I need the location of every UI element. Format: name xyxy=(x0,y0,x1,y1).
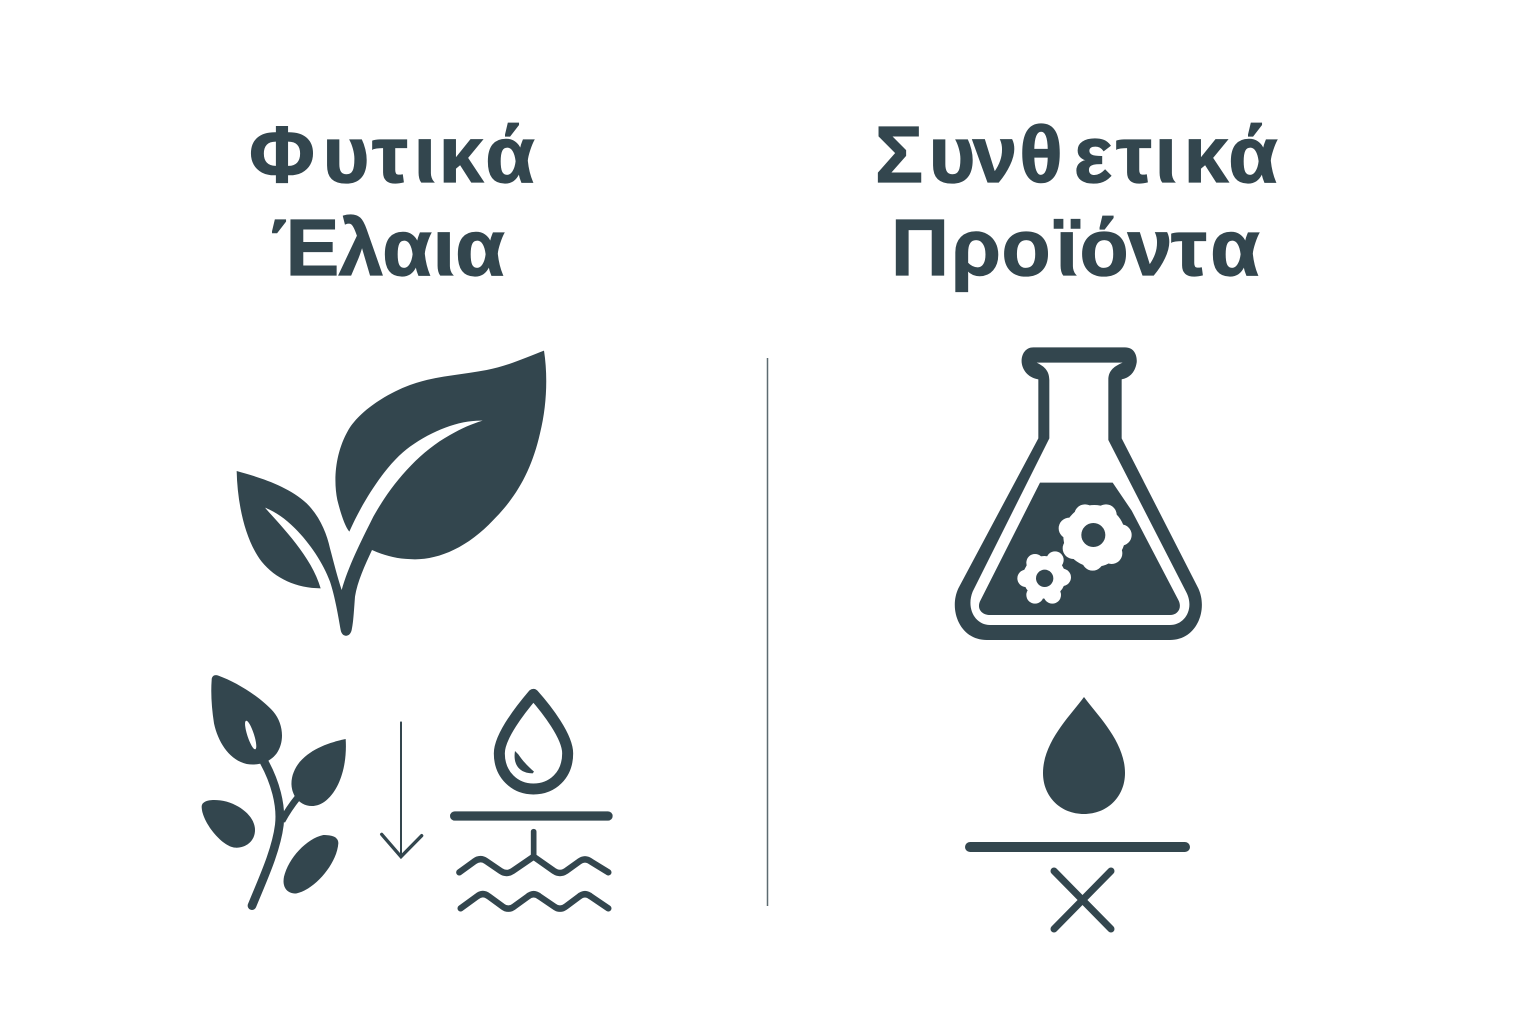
icon: oil drop absorbed into surface xyxy=(455,694,608,909)
icon: oil drop blocked by surface xyxy=(970,697,1185,929)
heading: synthetic products: Προϊόντα xyxy=(891,203,1260,292)
gear: small xyxy=(1017,551,1071,604)
heading: plant oils xyxy=(249,110,535,292)
heading: plant oils: Φυτικά xyxy=(249,110,535,199)
arrow: absorption down xyxy=(382,722,422,857)
icon: plant branch xyxy=(202,675,608,909)
heading: synthetic products: Συνθετικά xyxy=(875,110,1278,199)
heading: synthetic products xyxy=(875,110,1278,292)
center divider xyxy=(766,358,768,906)
gear: large xyxy=(1059,504,1132,571)
icon: flask with gears xyxy=(955,347,1202,640)
icon: large leaves sprout xyxy=(237,351,546,636)
heading: plant oils: Έλαια xyxy=(271,203,505,292)
